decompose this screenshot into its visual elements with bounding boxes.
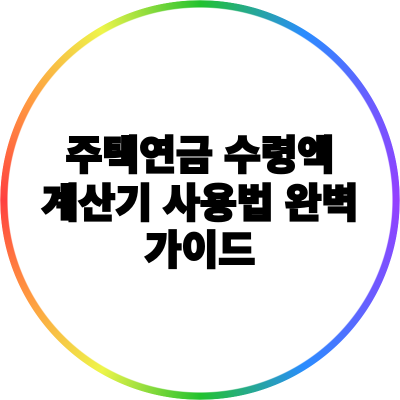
title <box>40 134 358 273</box>
title: 주택연금 수령액 <box>66 134 334 178</box>
title: 가이드 <box>145 229 255 273</box>
title: 계산기 사용법 완벽 <box>42 182 358 226</box>
